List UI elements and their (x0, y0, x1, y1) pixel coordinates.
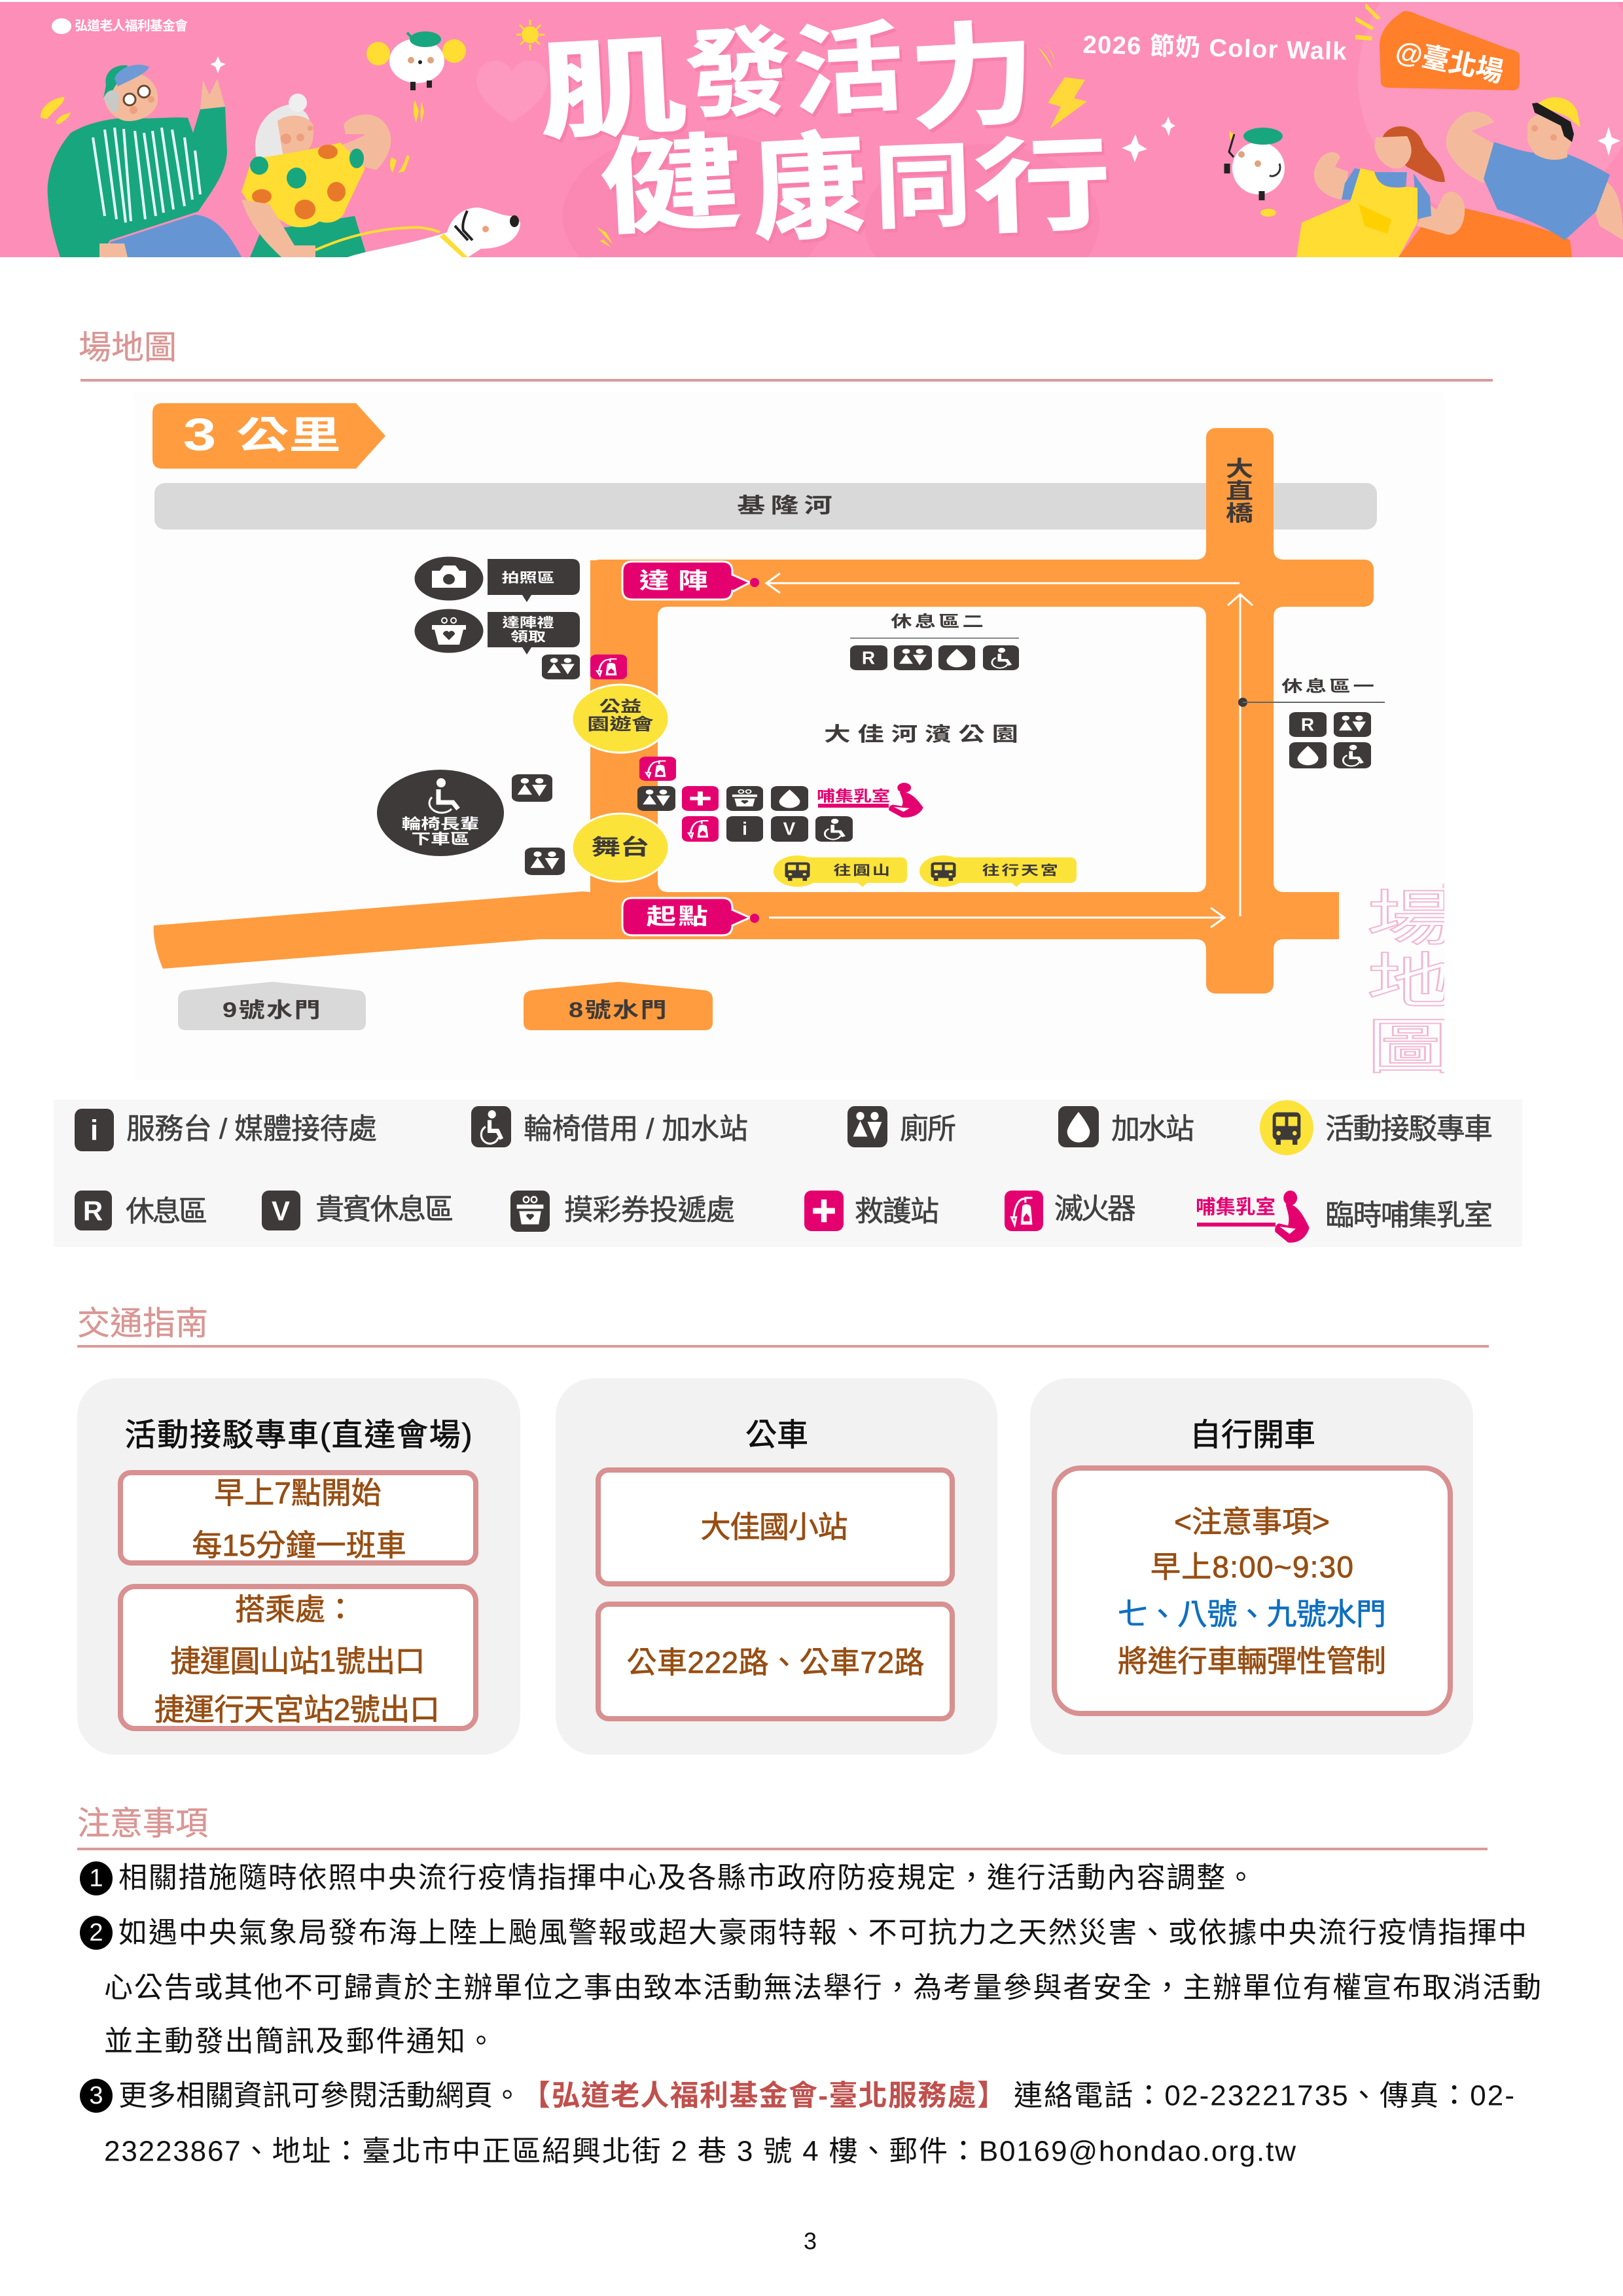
legend: service desk (75, 1109, 377, 1151)
rest area one: 休息區一 (1281, 678, 1377, 695)
legend: breastfeeding room (1196, 1191, 1493, 1243)
legend: toilet (847, 1106, 956, 1147)
note 3: 連絡電話：02-23221735、傳真：02- (1014, 2080, 1514, 2111)
illustration: dog (315, 207, 520, 257)
shuttle schedule box: 早上7點開始 (214, 1476, 382, 1510)
bus routes box: 公車222路、公車72路 (627, 1645, 924, 1679)
panel: public bus (556, 1378, 997, 1755)
distance tag: 3 (183, 409, 216, 460)
banner (0, 2, 1623, 257)
driving notice box (1054, 1468, 1450, 1713)
page number: 3 (804, 2228, 817, 2254)
venue map (134, 393, 1454, 1081)
legend: extinguisher: 滅火器 (1054, 1193, 1136, 1225)
service icon cluster: i (742, 818, 747, 839)
note 2: 如遇中央氣象局發布海上陸上颱風警報或超大豪雨特報、不可抗力之天然災害、或依據中央流行疫情指揮中 (118, 1916, 1527, 1949)
sparkles (210, 56, 1620, 162)
lightning bolt (1048, 77, 1087, 129)
shuttle stop: Yuanshan: 往圓山 (833, 863, 892, 878)
rest area one: R (1301, 715, 1314, 734)
photo zone callout (414, 556, 580, 602)
gate 8: 8號水門 (569, 998, 668, 1022)
distance tag (152, 403, 385, 469)
illustration: old man (48, 65, 241, 257)
distance tag: 公里 (236, 414, 341, 456)
legend: raffle box: 摸彩券投遞處 (564, 1194, 735, 1227)
legend: service desk: i (90, 1114, 98, 1147)
charity fair circle: 公益 (599, 698, 641, 715)
illustration: jumping mascot (1227, 128, 1285, 200)
legend: rest area (75, 1191, 207, 1230)
map watermark: 地 (1366, 948, 1454, 1015)
legend: first aid (804, 1191, 939, 1231)
legend: VIP area: 貴賓休息區 (315, 1194, 454, 1225)
legend: rest area: 休息區 (126, 1195, 207, 1228)
legend: toilet: 廁所 (900, 1113, 956, 1145)
title: 發 (683, 18, 793, 130)
wheelchair drop-off: 輪椅長輩 (402, 816, 479, 833)
bus stop box (598, 1470, 952, 1584)
wheelchair drop-off: 下車區 (411, 831, 470, 848)
driving notice box: <注意事項> (1174, 1505, 1330, 1539)
legend: wheelchair (471, 1106, 748, 1147)
shuttle schedule box: 每15分鐘一班車 (192, 1528, 406, 1562)
notes list (80, 1861, 1541, 2168)
finish gift callout (414, 608, 580, 655)
service icon cluster (637, 786, 853, 842)
rest area two: R (862, 648, 875, 668)
map watermark: 場 (1366, 886, 1454, 952)
note 2: 並主動發出簡訊及郵件通知。 (104, 2025, 495, 2058)
rest area one (1238, 678, 1385, 768)
note 1: 相關措施隨時依照中央流行疫情指揮中心及各縣市政府防疫規定，進行活動內容調整。 (118, 1861, 1255, 1894)
title: 活 (791, 12, 906, 128)
title (535, 11, 1113, 255)
service icon cluster: V (783, 818, 796, 839)
panel: shuttle bus: 活動接駁專車(直達會場) (124, 1418, 473, 1453)
rest area two: 休息區二 (891, 613, 986, 630)
note 2: 心公告或其他不可歸責於主辦單位之事由致本活動無法舉行，為考量參與者安全，主辦單位有權宣布取消活動 (104, 1971, 1541, 2004)
map icons: upper left (512, 655, 676, 875)
note 3: 【弘道老人福利基金會-臺北服務處】 (522, 2080, 1006, 2111)
breastfeeding room logo: 哺集乳室 (817, 787, 890, 804)
illustration: man (1399, 98, 1623, 257)
title: 肌 (535, 27, 690, 152)
driving notice box: 早上8:00~9:30 (1150, 1550, 1353, 1584)
title: 同 (873, 134, 972, 240)
location tag: @臺北場 (1393, 35, 1507, 88)
gate 9: 9號水門 (223, 998, 322, 1022)
photo zone callout: 拍照區 (502, 571, 554, 585)
bus stop box: 大佳國小站 (700, 1510, 848, 1544)
shuttle stop: Yuanshan (774, 855, 907, 887)
panel: driving (1030, 1378, 1473, 1755)
legend: service desk: 服務台 / 媒體接待處 (126, 1113, 377, 1145)
finish gift callout: 達陣禮 (502, 615, 554, 630)
charity fair circle (572, 685, 669, 753)
map legend (54, 1100, 1522, 1247)
river: 基隆河 (737, 494, 838, 518)
legend: rest area: R (83, 1195, 103, 1227)
section heading: venue map (79, 329, 1493, 382)
legend: raffle box (510, 1191, 735, 1232)
illustration: sun (516, 20, 544, 50)
title: 康 (749, 122, 869, 255)
shuttle boarding box: 捷運圓山站1號出口 (170, 1644, 425, 1678)
subtitle: 2026 節奶 Color Walk (1082, 31, 1347, 65)
note 1: 1 (89, 1865, 103, 1892)
note 3: 23223867、地址：臺北市中正區紹興北街 2 巷 3 號 4 樓、郵件：B0169@hondao.org.tw (104, 2135, 1296, 2168)
note 2 (80, 1916, 1541, 2058)
driving notice box: 七、八號、九號水門 (1118, 1597, 1386, 1631)
park label: 大佳河濱公園 (824, 723, 1026, 745)
finish label: 達陣 (639, 568, 717, 593)
legend: breastfeeding room: 臨時哺集乳室 (1325, 1199, 1493, 1232)
note 2: 2 (89, 1919, 103, 1946)
shuttle schedule box (120, 1473, 476, 1563)
legend: water (1058, 1106, 1194, 1147)
section heading: notes: 注意事項 (77, 1805, 208, 1842)
bridge label (1226, 457, 1253, 526)
driving notice box: 將進行車輛彈性管制 (1118, 1644, 1386, 1678)
shuttle boarding box: 捷運行天宮站2號出口 (154, 1693, 440, 1727)
shuttle boarding box (120, 1587, 476, 1729)
legend: extinguisher (1005, 1191, 1136, 1231)
bridge label: 大 (1226, 457, 1253, 481)
shuttle stop: Xingtian Temple (919, 855, 1077, 887)
legend: water: 加水站 (1111, 1113, 1194, 1145)
foundation logo: 弘道老人福利基金會 (75, 18, 188, 33)
breastfeeding room logo (817, 783, 923, 817)
river (154, 483, 1377, 529)
stage circle: 舞台 (591, 836, 650, 859)
shuttle boarding box: 搭乘處： (235, 1592, 355, 1626)
location tag (1380, 11, 1520, 90)
panel: shuttle bus (77, 1378, 520, 1755)
gate 8 (524, 982, 713, 1030)
bridge label: 橋 (1226, 502, 1253, 526)
legend: first aid: 救護站 (855, 1195, 939, 1228)
charity fair circle: 園遊會 (587, 715, 654, 734)
gate 9 (178, 982, 366, 1030)
legend: shuttle (1260, 1100, 1493, 1155)
illustration: cheering mascot (366, 31, 466, 90)
illustration: grandma (241, 94, 391, 257)
finish gift callout: 領取 (510, 630, 546, 644)
legend: breastfeeding room: 哺集乳室 (1196, 1196, 1275, 1219)
stage circle (572, 814, 669, 882)
bridge label: 直 (1226, 480, 1253, 503)
section heading: notes (77, 1805, 1488, 1850)
section heading: venue map: 場地圖 (79, 329, 177, 366)
note 3: 更多相關資訊可參閱活動網頁。 (118, 2080, 522, 2111)
walking route roads (154, 428, 1374, 994)
rest area two (850, 613, 1019, 670)
bus routes box (598, 1604, 952, 1719)
start label: 起點 (646, 904, 710, 929)
shuttle stop: Xingtian Temple: 往行天宮 (982, 863, 1060, 878)
panel: public bus: 公車 (745, 1418, 808, 1453)
note 3: 3 (89, 2082, 103, 2109)
accent marks: left (41, 3, 1381, 247)
legend: shuttle: 活動接駁專車 (1325, 1113, 1493, 1145)
route arrows (766, 573, 1253, 927)
panel: driving: 自行開車 (1190, 1418, 1315, 1453)
title: 行 (972, 128, 1113, 246)
title: 力 (906, 11, 1039, 143)
section heading: transport guide (77, 1305, 1489, 1348)
start label (622, 898, 759, 935)
legend: VIP area (262, 1191, 454, 1230)
note 3 (80, 2079, 1514, 2168)
wheelchair drop-off (377, 770, 504, 856)
finish label (622, 562, 759, 600)
map watermark (1368, 884, 1444, 1073)
legend: wheelchair: 輪椅借用 / 加水站 (524, 1113, 748, 1145)
title: 健 (597, 124, 745, 248)
section heading: transport guide: 交通指南 (77, 1305, 208, 1342)
map watermark: 圖 (1366, 1014, 1454, 1081)
legend: VIP area: V (272, 1195, 290, 1227)
illustration: woman (1296, 126, 1465, 257)
